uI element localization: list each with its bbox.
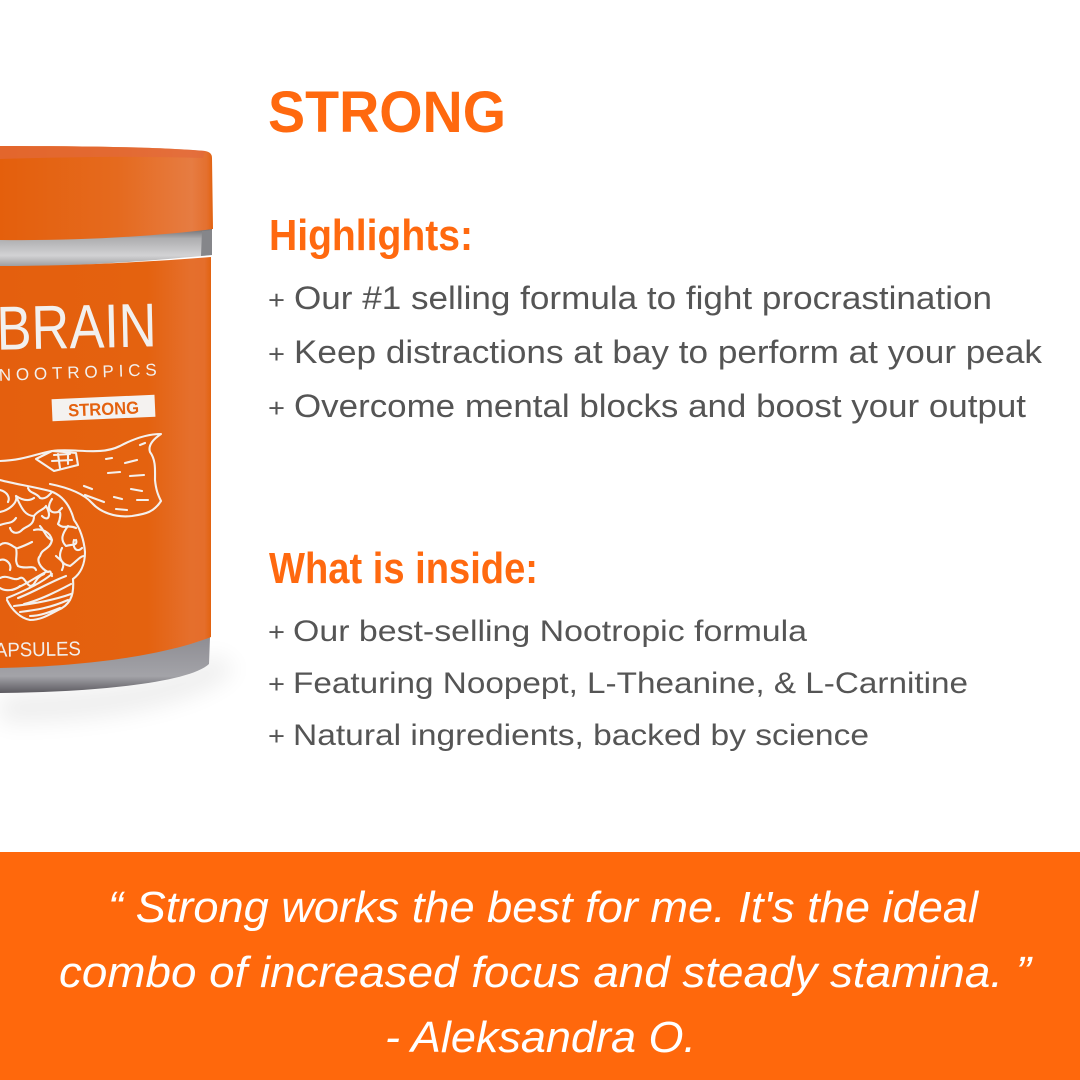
highlights list: +	[268, 339, 285, 369]
inside list: +	[268, 721, 285, 751]
brain outline	[0, 480, 85, 579]
title: STRONG	[268, 80, 506, 145]
label: STRONG tag	[52, 395, 155, 421]
testimonial banner	[0, 852, 1080, 1080]
testimonial quote: “ Strong works the best for me. It's the ideal	[108, 883, 979, 932]
highlights list: +	[268, 285, 285, 315]
cap rim highlight	[0, 146, 205, 159]
label: BRAIN wordmark: BRAIN	[0, 291, 157, 364]
highlights list: Overcome mental blocks and boost your output	[294, 388, 1026, 424]
bottle shadow	[0, 655, 236, 722]
inside list: Our best-selling Nootropic formula	[293, 615, 807, 648]
cape emblem	[36, 451, 78, 471]
highlights list: +	[268, 393, 285, 423]
highlights list	[268, 280, 1043, 424]
highlights list: Keep distractions at bay to perform at your peak	[294, 334, 1043, 370]
bottle cap	[0, 146, 213, 240]
testimonial quote: combo of increased focus and steady stamina. ”	[59, 948, 1033, 997]
glass neck band	[0, 229, 212, 267]
cape	[0, 434, 161, 516]
label: STRONG tag: STRONG	[68, 397, 139, 421]
heading: what is inside: What is inside:	[269, 544, 538, 593]
inside list: +	[268, 617, 285, 647]
inside list: Featuring Noopept, L-Theanine, & L-Carnitine	[293, 667, 968, 700]
inside list: +	[268, 669, 285, 699]
product bottle	[0, 146, 236, 722]
glass base	[0, 637, 210, 693]
inside list: Natural ingredients, backed by science	[293, 719, 869, 752]
glass neck side	[201, 230, 212, 256]
testimonial quote	[59, 883, 1033, 1062]
inside list	[268, 615, 968, 752]
label: NOOTROPICS: NOOTROPICS	[0, 360, 157, 385]
bottle body	[0, 257, 211, 668]
heading: highlights: Highlights:	[269, 211, 473, 260]
cerebellum	[7, 572, 73, 620]
testimonial quote: - Aleksandra O.	[385, 1013, 696, 1062]
highlights list: Our #1 selling formula to fight procrastination	[294, 280, 992, 316]
brain folds	[0, 488, 84, 590]
illustration: caped brain	[0, 434, 161, 620]
cape dashes	[84, 443, 148, 510]
